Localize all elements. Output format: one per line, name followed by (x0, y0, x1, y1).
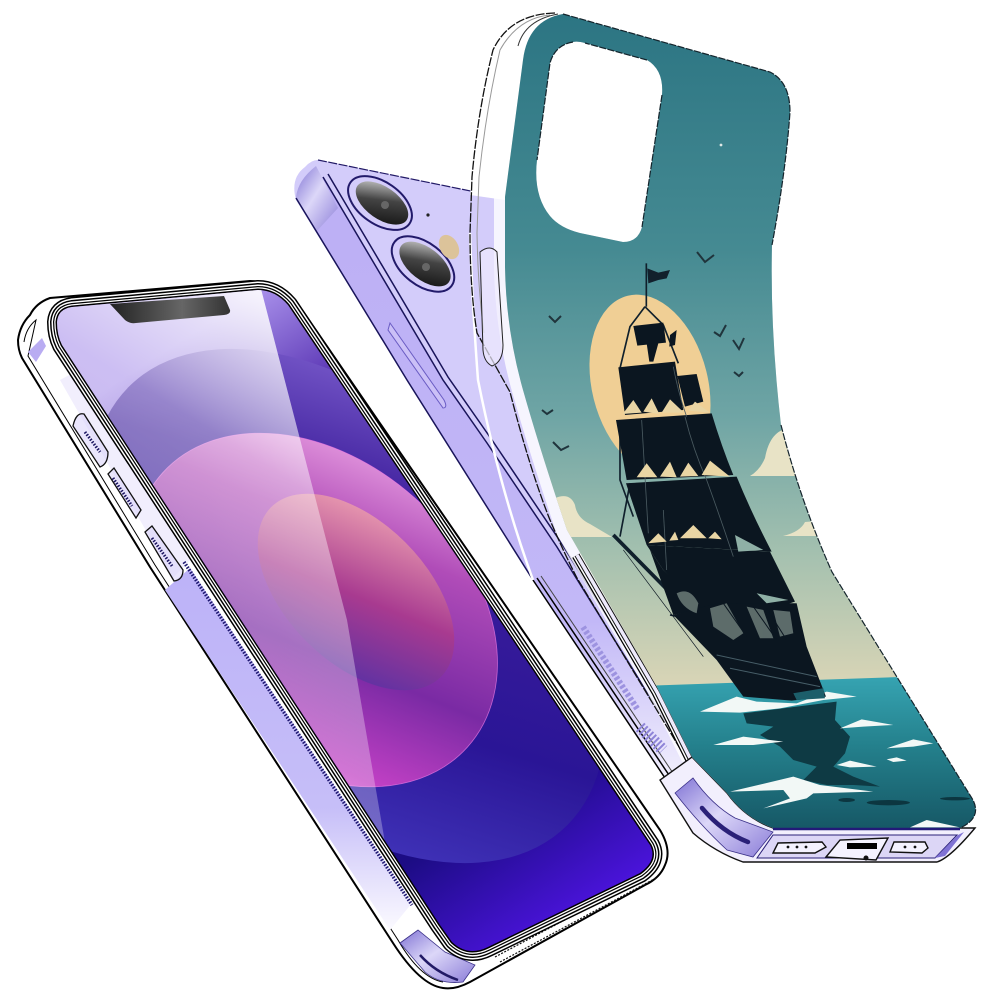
front phone (17, 280, 669, 990)
outer black edge lines (533, 576, 683, 793)
sky (505, 14, 902, 690)
volume button slot (388, 323, 446, 408)
flag (647, 268, 670, 283)
camera lens upper (338, 165, 422, 241)
netting (677, 591, 793, 640)
dark sea marks (838, 797, 970, 805)
bottom edge hatch (490, 868, 656, 962)
flash (435, 231, 463, 263)
wallpaper pink ellipse (153, 432, 498, 788)
port band (757, 835, 957, 858)
charging port (847, 843, 877, 849)
top edge dashes (318, 160, 505, 198)
bottom corner metal (400, 930, 475, 983)
moon (590, 294, 710, 454)
bottom navy rim (773, 828, 960, 830)
birds (542, 252, 744, 450)
case side button (480, 248, 503, 366)
tiny star (720, 144, 722, 146)
printed case back (505, 13, 976, 830)
lavender frame strip (165, 568, 412, 930)
sea (656, 677, 976, 828)
back phone corner band (296, 166, 338, 232)
wallpaper large ellipse (108, 349, 599, 863)
port screws (787, 846, 916, 860)
cloud far right (783, 522, 816, 536)
sail rope lines (642, 367, 733, 570)
wallpaper (57, 290, 652, 951)
case side label box (640, 727, 663, 750)
back phone side band (296, 177, 692, 793)
outer left line (24, 320, 443, 982)
lower rim stripes (577, 555, 773, 833)
lavender corner top (28, 338, 46, 362)
ship (613, 263, 826, 701)
cloud right (750, 430, 795, 476)
case outer shell (18, 281, 668, 988)
reflection of ship (743, 702, 880, 787)
speaker slots and port (773, 838, 928, 860)
cream furled sails (623, 398, 730, 543)
pale sails in shadow (735, 535, 788, 603)
rigging lines (612, 263, 679, 617)
sea foam (700, 692, 960, 827)
lavender side strip (60, 372, 190, 578)
sea marks (700, 692, 970, 827)
netting lines (623, 550, 787, 657)
back phone: purple body (294, 160, 700, 793)
screen bezel stripes (57, 290, 652, 951)
speaker slot (420, 955, 458, 980)
bottom edge of back case with ports (660, 757, 975, 862)
case side label hatch (583, 627, 638, 710)
wallpaper inner ellipse (258, 494, 454, 690)
microphone dot (426, 213, 430, 217)
hatched line along side (184, 562, 412, 905)
bottom case right corner (935, 832, 964, 858)
buttons (73, 414, 183, 581)
button hatch lines (85, 432, 172, 566)
purple corner (675, 778, 773, 857)
cloud left (556, 496, 612, 537)
speaker slot (702, 808, 748, 842)
hull waterline (793, 688, 825, 700)
hull highlight lines (717, 655, 820, 687)
notch (110, 296, 230, 323)
back phone side lines (296, 174, 697, 765)
camera lens lower (382, 225, 464, 303)
glass glare (57, 290, 384, 840)
sails (616, 323, 826, 701)
clear case left rim (470, 12, 773, 833)
